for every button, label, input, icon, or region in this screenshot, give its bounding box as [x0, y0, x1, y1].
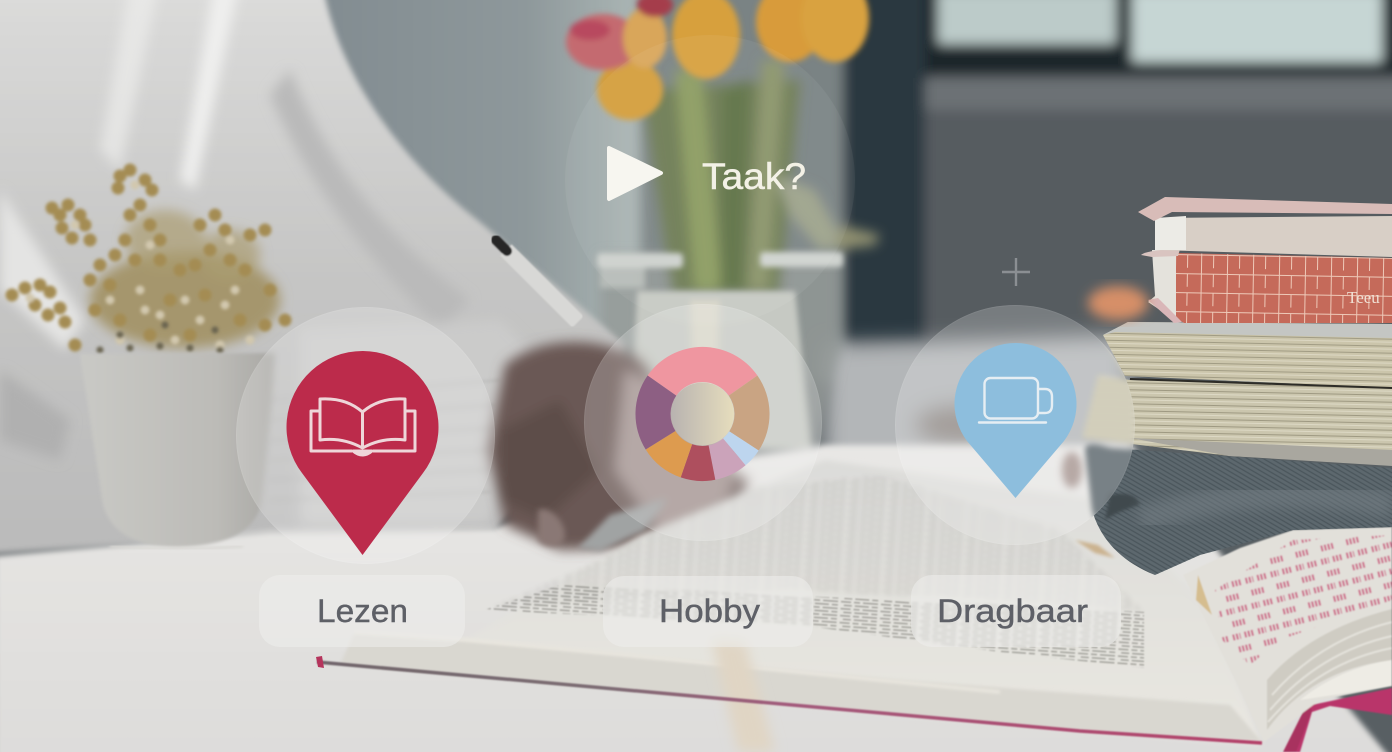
pen [496, 240, 578, 322]
label: Lezen: Lezen [317, 593, 408, 629]
icon: blue map pin [954, 343, 1076, 498]
icon: open book [311, 399, 415, 455]
icon: red map pin [286, 351, 439, 555]
icon: coffee cup [979, 378, 1052, 422]
icon: play triangle [609, 148, 661, 199]
icon: plus sign [1002, 258, 1030, 286]
far table behind book [825, 335, 1130, 480]
panel: Hobby [584, 304, 822, 647]
table surface [0, 445, 1392, 752]
potted plant [12, 170, 285, 549]
panel: Dragbaar [895, 305, 1135, 647]
label pill: Lezen [259, 575, 465, 647]
glass circle [236, 307, 495, 564]
tulips and vase [566, 0, 880, 450]
glass circle [584, 304, 822, 541]
book spine title: Teeu [1347, 288, 1380, 307]
panel: faint circle behind heading [565, 35, 855, 325]
label pill: Hobby [603, 576, 813, 647]
label pill: Dragbaar [911, 575, 1121, 647]
right open book with pink text [1183, 527, 1392, 752]
orange blur behind books [1088, 286, 1148, 320]
label: Hobby: Hobby [659, 593, 760, 629]
pin with cup icon and label [937, 343, 1088, 629]
glass circle [895, 305, 1135, 545]
open book with printed text [316, 460, 1262, 752]
panel: Lezen [236, 307, 495, 647]
stack of books and folded cloth [1082, 197, 1392, 575]
donut and label [636, 346, 770, 629]
hand [488, 342, 748, 551]
heading: Taak?: Taak? [702, 156, 806, 197]
donut chart [635, 347, 770, 481]
pin with book icon and label [286, 351, 438, 629]
sweater [0, 0, 625, 553]
label: Dragbaar: Dragbaar [937, 593, 1088, 629]
